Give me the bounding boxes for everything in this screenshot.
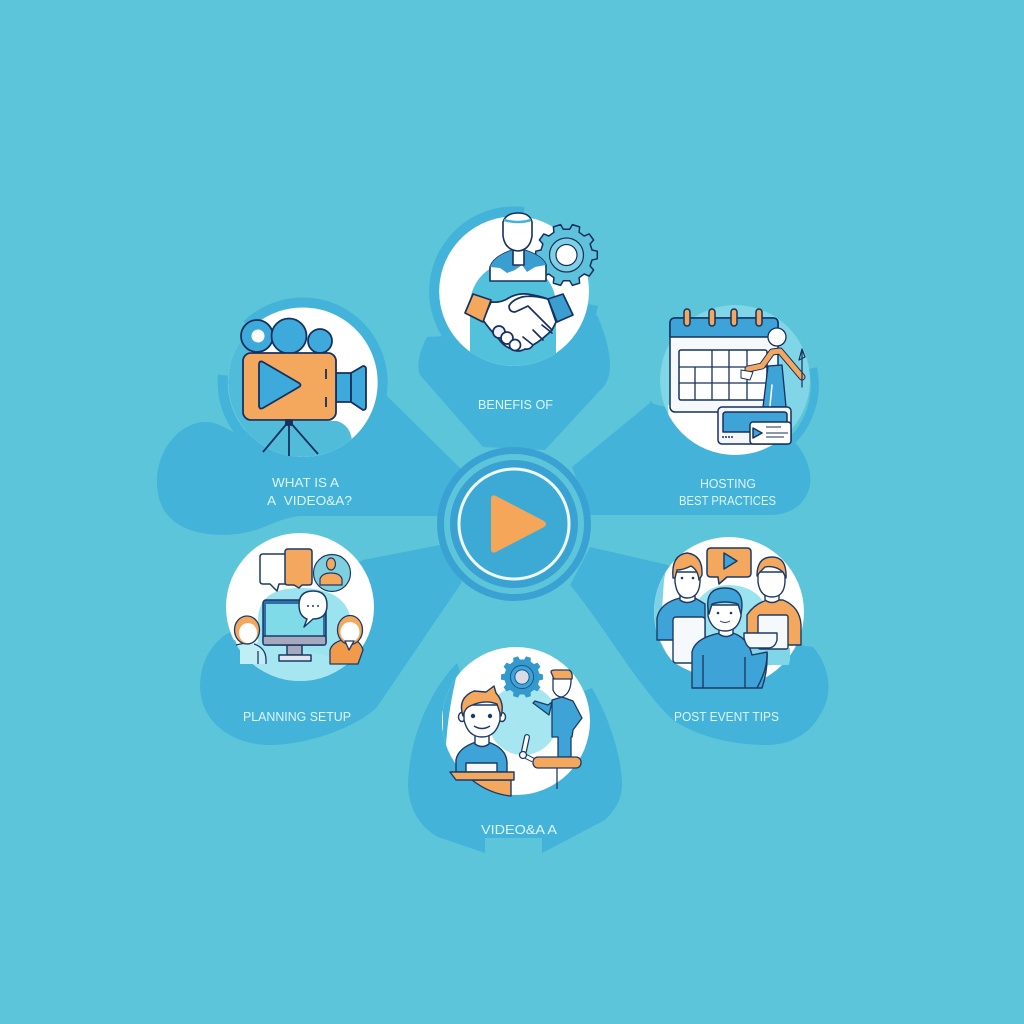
icon disc — [654, 537, 804, 687]
icon: monitor — [263, 591, 327, 661]
disc shade — [470, 269, 556, 366]
disc white base — [668, 405, 773, 455]
icon: right attendee — [747, 557, 801, 649]
disc shade — [650, 400, 678, 450]
petal: hosting — [572, 403, 810, 515]
icon disc — [439, 216, 589, 366]
label: benefits: BENEFIS OF — [478, 398, 553, 412]
icon: person — [490, 213, 546, 281]
icon: student — [450, 686, 514, 796]
label: hosting best practices — [679, 477, 776, 508]
center play button — [440, 450, 588, 598]
icon disc — [442, 647, 590, 795]
panel: post event tips — [570, 537, 829, 745]
panel: video Q&A — [408, 647, 622, 853]
label: planning setup: PLANNING SETUP — [243, 710, 351, 724]
panel: what is a video Q&A — [157, 302, 462, 535]
petal: video Q&A — [408, 663, 622, 853]
label: hosting best practices: HOSTING — [700, 477, 756, 491]
petal: benefits — [418, 315, 610, 450]
white ring — [459, 469, 569, 579]
label: what is a video Q&A — [267, 476, 352, 508]
disc shade — [258, 588, 350, 681]
petal: what is a — [157, 380, 462, 535]
icon: left attendee — [657, 553, 705, 663]
icon: play triangle — [491, 495, 546, 553]
disc shade — [698, 585, 763, 638]
label: video Q&A: VIDEO&A A — [481, 823, 558, 837]
outer rings — [440, 450, 588, 598]
label: what is a video Q&A: WHAT IS A — [272, 476, 340, 490]
label: post event tips: POST EVENT TIPS — [674, 710, 779, 724]
icon ring — [665, 368, 815, 464]
icon: right attendee — [330, 616, 363, 664]
disc left tint — [654, 572, 666, 653]
icon: left attendee — [234, 616, 266, 664]
icon disc — [226, 533, 374, 681]
icon: video bubble — [707, 548, 751, 584]
label: hosting best practices: BEST PRACTICES — [679, 494, 776, 508]
icon disc — [660, 305, 810, 455]
icon: gear — [536, 225, 597, 285]
icon: handshake — [465, 294, 573, 351]
panel: benefits — [418, 211, 610, 450]
icon: speech bubbles — [260, 549, 312, 591]
icon: video camera — [241, 318, 366, 456]
inner disc — [454, 464, 574, 584]
disc shade — [488, 685, 558, 755]
disc shade — [228, 340, 352, 457]
icon: presenter — [520, 670, 582, 789]
icon: front attendee — [692, 588, 777, 688]
panel: hosting best practices — [572, 305, 815, 515]
icon: person at calendar — [741, 328, 805, 407]
icon: calendar — [670, 309, 778, 412]
panel: planning setup — [200, 533, 462, 745]
icon ring — [223, 302, 383, 462]
petal: planning — [200, 545, 462, 745]
icon: avatar — [314, 554, 350, 592]
icon: gear — [501, 656, 543, 698]
label: what is a video Q&A: A VIDEO&A? — [267, 494, 352, 508]
icon disc — [228, 307, 378, 457]
icon ring — [434, 211, 593, 371]
petal: post event — [570, 547, 829, 745]
icon: video card — [718, 407, 791, 444]
